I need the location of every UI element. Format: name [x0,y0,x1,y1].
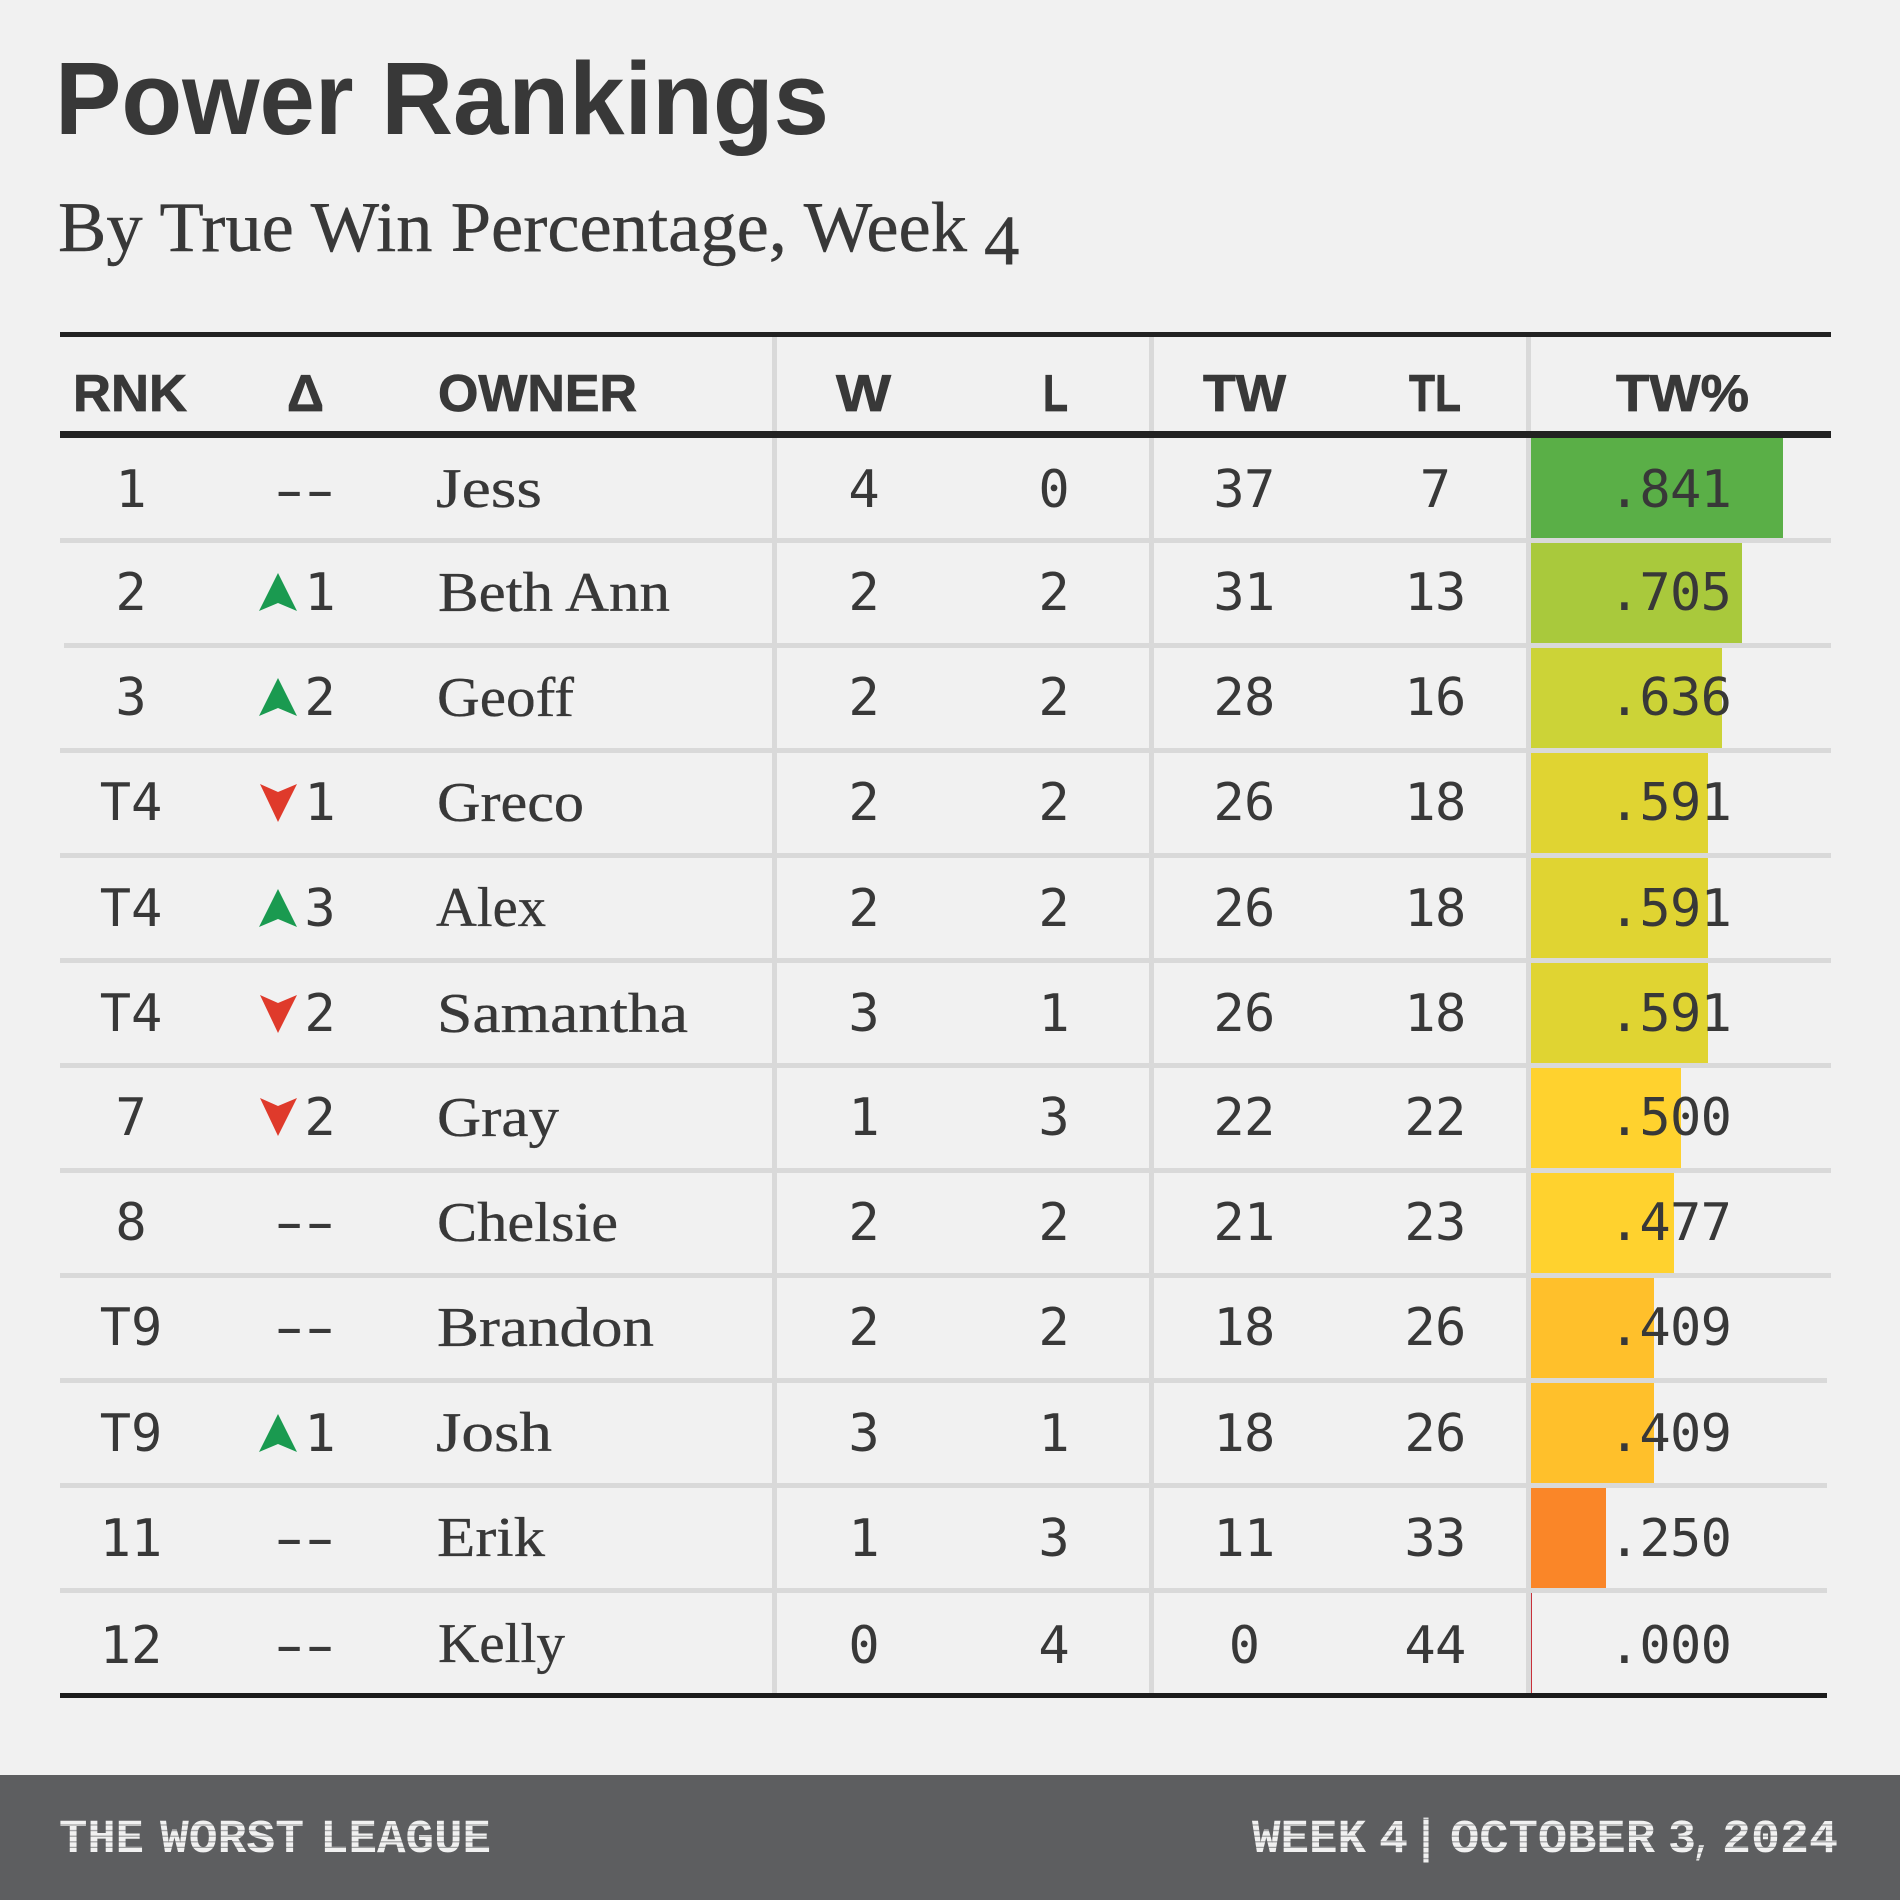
row 6: Samantha [100,983,1731,1045]
row 12: Kelly: .000 [1609,1616,1731,1676]
row 2: Beth Ann [115,562,1731,624]
footer date: 3 [1668,1814,1696,1867]
row 1: Jess: 4 [848,460,880,520]
row 4: Greco: 2 [848,773,880,833]
row 12: Kelly: Kelly [438,1613,565,1675]
row 6: Samantha: 1 [1038,984,1070,1044]
table header row: Δ [287,365,324,423]
row 12: Kelly [100,1613,1731,1676]
row 6: Samantha: 18 [1404,984,1466,1044]
row 11: Erik: -- [264,1509,331,1569]
table header row: L [1043,365,1068,423]
row 4: Greco: 1 [304,773,336,833]
row 11: Erik: 11 [100,1509,162,1569]
table header row: TW% [1616,365,1749,423]
row 5: Alex: 18 [1404,879,1466,939]
row 2: Beth Ann: 2 [1038,563,1070,623]
row 2: Beth Ann: .705 [1609,563,1731,623]
row 12: Kelly: 4 [1038,1616,1070,1676]
row 5: Alex: 2 [1038,879,1070,939]
row 8: Chelsie: 8 [115,1193,147,1253]
row 2: Beth Ann: Beth Ann [438,562,670,624]
row 5: Alex: Alex [436,877,546,939]
row 5: Alex: .591 [1609,879,1731,939]
row 4: Greco: 18 [1404,773,1466,833]
row 2: Beth Ann: 1 [304,563,336,623]
row 10: Josh: 18 [1213,1404,1275,1464]
row 12: Kelly: 0 [1229,1616,1259,1676]
row 4: Greco: 2 [1038,773,1070,833]
row 12: Kelly: 44 [1404,1616,1466,1676]
row 3: Geoff [115,667,1731,729]
row 3: Geoff: 28 [1213,668,1275,728]
footer date: WEEK [1252,1814,1367,1867]
row 1: Jess: 7 [1420,460,1450,520]
row 2: Beth Ann: 2 [115,563,147,623]
row 2: Beth Ann: 31 [1213,563,1275,623]
row 1: Jess: 37 [1213,460,1275,520]
title: Power Rankings [55,41,829,156]
table header row: TL [1409,365,1461,423]
row 3: Geoff: 3 [115,668,147,728]
row 3: Geoff: 16 [1404,668,1466,728]
row 12: Kelly: 0 [848,1616,880,1676]
footer date: OCTOBER [1450,1814,1656,1867]
row 7: Gray: 3 [1038,1088,1070,1148]
row 5: Alex: 26 [1213,879,1275,939]
row 8: Chelsie: .477 [1609,1193,1731,1253]
row 1: Jess: 1 [115,460,147,520]
row 3: Geoff: Geoff [437,667,574,729]
row 9: Brandon: 18 [1213,1298,1275,1358]
row 4: Greco: 26 [1213,773,1275,833]
row 10: Josh: 1 [304,1404,336,1464]
row 3: Geoff: 2 [304,668,336,728]
table header row: W [836,365,892,423]
row 6: Samantha: 26 [1213,984,1275,1044]
row 9: Brandon: T9 [100,1298,162,1358]
row 1: Jess: .841 [1609,460,1731,520]
row 11: Erik: 1 [848,1509,880,1569]
row 9: Brandon: Brandon [437,1297,654,1359]
row 10: Josh: 26 [1404,1404,1466,1464]
row 11: Erik: .250 [1609,1509,1731,1569]
row 6: Samantha: Samantha [437,983,688,1045]
row 1: Jess: -- [264,461,331,521]
row 4: Greco [100,772,1731,834]
row 7: Gray: 22 [1213,1088,1275,1148]
row 4: Greco: .591 [1609,773,1731,833]
row 7: Gray: 7 [115,1088,147,1148]
row 7: Gray: Gray [437,1087,559,1149]
row 3: Geoff: 2 [848,668,880,728]
row 8: Chelsie: 23 [1404,1193,1466,1253]
row 11: Erik: 11 [1213,1509,1275,1569]
row 11: Erik: Erik [437,1507,545,1569]
row 9: Brandon: -- [264,1298,331,1358]
row 10: Josh: .409 [1609,1404,1731,1464]
icon: down arrow [260,784,297,822]
subtitle: 4 [984,202,1020,280]
row 7: Gray: 22 [1404,1088,1466,1148]
row 5: Alex: T4 [100,879,162,939]
row 4: Greco: T4 [100,773,162,833]
row 7: Gray: 1 [848,1088,880,1148]
row 9: Brandon [100,1297,1731,1359]
row 9: Brandon: 26 [1404,1298,1466,1358]
row 6: Samantha: T4 [100,984,162,1044]
row 4: Greco: Greco [437,772,584,834]
row 8: Chelsie: 2 [848,1193,880,1253]
row 6: Samantha: 3 [848,984,880,1044]
table header row: OWNER [438,365,637,423]
table header row [73,365,1749,423]
footer date: | [1414,1814,1438,1867]
row 10: Josh [100,1402,1731,1464]
row 9: Brandon: .409 [1609,1298,1731,1358]
icon: down arrow [260,1098,297,1136]
row 11: Erik: 33 [1404,1509,1466,1569]
row 6: Samantha: .591 [1609,984,1731,1044]
row 7: Gray [115,1087,1731,1149]
icon: up arrow [259,573,297,611]
row 9: Brandon: 2 [1038,1298,1070,1358]
row 5: Alex [100,877,1731,939]
row 1: Jess: Jess [436,458,542,520]
bar chart: true win percentage [1531,438,1783,1693]
row 2: Beth Ann: 13 [1404,563,1466,623]
footer league name: WORST [160,1814,304,1867]
table header row: RNK [73,365,187,423]
footer league name: THE [59,1814,144,1867]
icon: down arrow [260,995,297,1033]
row 8: Chelsie [115,1192,1731,1254]
table header row: TW [1203,365,1287,423]
row 12: Kelly: -- [264,1616,331,1676]
row 10: Josh: 1 [1038,1404,1070,1464]
row 1: Jess [115,458,1731,521]
row 3: Geoff: 2 [1038,668,1070,728]
row 11: Erik [100,1507,1731,1569]
table top rule [60,332,1831,337]
icon: up arrow [259,1414,297,1452]
row 1: Jess: 0 [1038,460,1070,520]
row 8: Chelsie: 21 [1213,1193,1275,1253]
icon: up arrow [259,678,297,716]
row 7: Gray: 2 [304,1088,336,1148]
row 8: Chelsie: Chelsie [437,1192,618,1254]
footer date: 2024 [1722,1814,1838,1867]
header bottom rule [60,431,1831,438]
row 12: Kelly: 12 [100,1616,162,1676]
row 6: Samantha: 2 [304,984,336,1044]
icon: up arrow [259,889,297,927]
table bottom rule [60,1693,1827,1698]
table grid lines [60,337,1831,1693]
row 7: Gray: .500 [1609,1088,1731,1148]
footer date: , [1692,1814,1712,1867]
row 8: Chelsie: 2 [1038,1193,1070,1253]
footer date: 4 [1379,1814,1408,1867]
row 2: Beth Ann: 2 [848,563,880,623]
row 9: Brandon: 2 [848,1298,880,1358]
footer league name: LEAGUE [320,1814,491,1867]
row 10: Josh: T9 [100,1404,162,1464]
footer band [0,1775,1900,1900]
row 10: Josh: Josh [436,1402,552,1464]
row 5: Alex: 3 [304,879,336,939]
row 10: Josh: 3 [848,1404,880,1464]
subtitle: By True Win Percentage, Week [58,189,968,267]
row 5: Alex: 2 [848,879,880,939]
row 11: Erik: 3 [1038,1509,1070,1569]
row 3: Geoff: .636 [1609,668,1731,728]
row 8: Chelsie: -- [264,1193,331,1253]
